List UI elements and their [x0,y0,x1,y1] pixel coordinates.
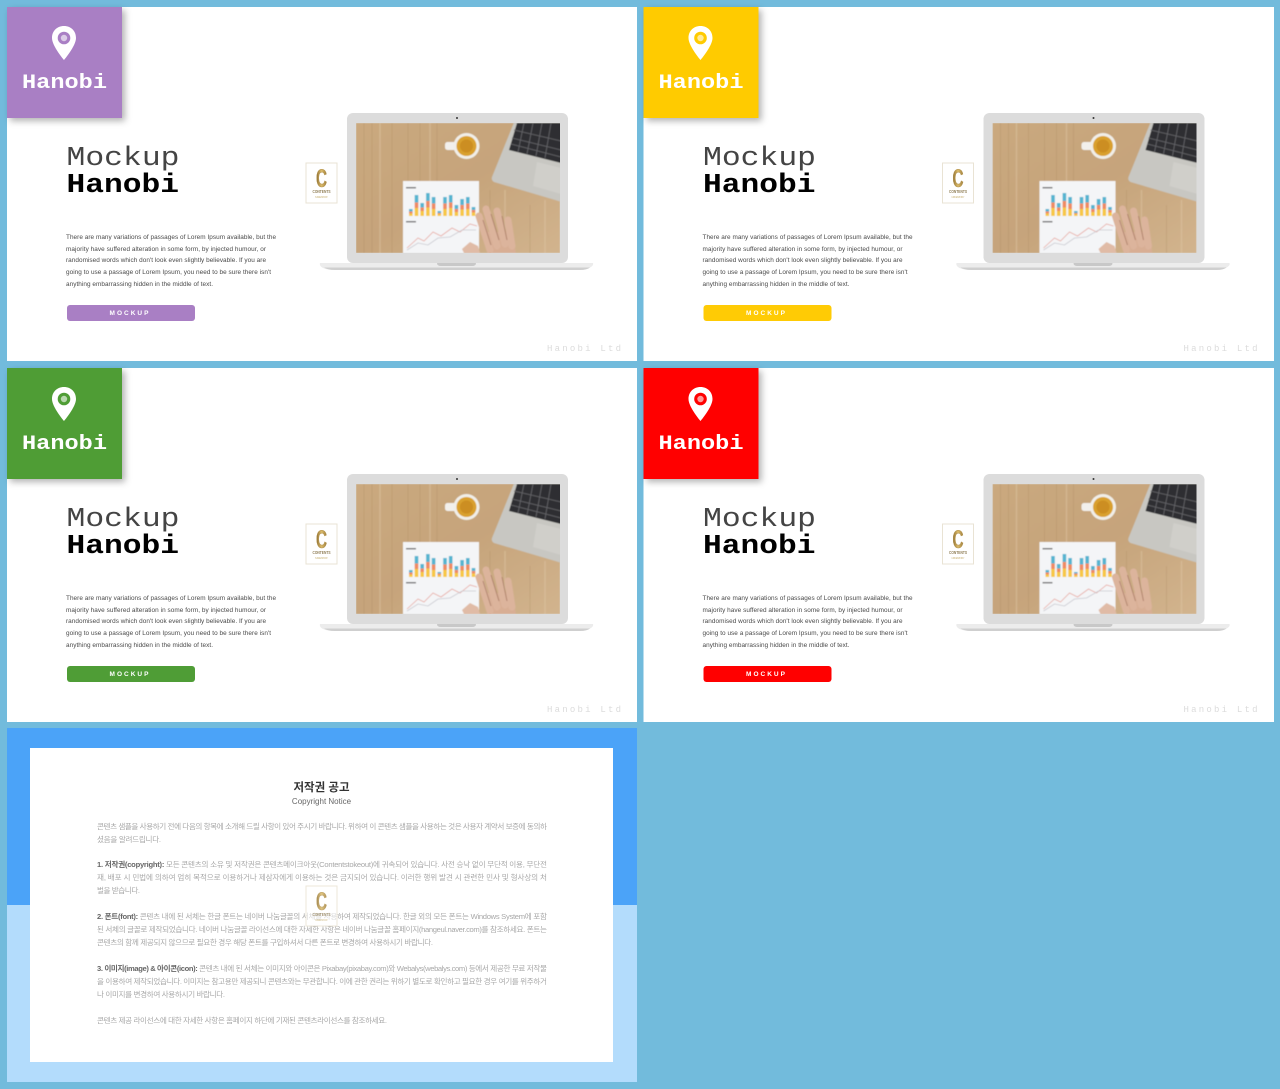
body text: going to use a passage of Lorem Ipsum, you need to be sure there isn't [702,269,908,276]
notice section 1: 1. 저작권(copyright): 모든 콘텐츠의 소유 및 저작권은 콘텐츠메이크아웃(Contentstokeout)에 귀속되어 있습니다. 사전 승낙 없이 무단적 이용, 무단전 [97,859,547,869]
button [67,666,195,682]
watermark logo [306,524,337,564]
body text: majority have suffered alteration in some form, by injected humour, or [66,246,267,253]
body text: going to use a passage of Lorem Ipsum, you need to be sure there isn't [66,630,271,637]
badge [644,7,758,118]
watermark logo: MAKE STORY [315,556,328,560]
body text: randomised words which don't look even slightly believable. If you are [66,257,266,264]
watermark logo: C [952,165,964,193]
body text: anything embarrassing hidden in the middle of text. [66,642,213,649]
heading: Mockup [66,143,180,173]
notice intro [97,821,547,844]
watermark logo [306,163,337,203]
watermark logo [942,524,974,564]
watermark logo: C [316,165,327,193]
heading [66,143,180,200]
footer label: Hanobi Ltd [1184,344,1258,354]
body text: There are many variations of passages of Lorem Ipsum available, but the [702,595,913,602]
heading: Hanobi [66,531,179,561]
badge: Hanobi [658,72,744,95]
panel: yellow mockup slide [644,7,1274,361]
heading: Mockup [703,143,816,173]
laptop mockup [320,474,593,631]
body text [702,234,913,288]
laptop mockup [956,474,1230,631]
body text: majority have suffered alteration in some form, by injected humour, or [66,607,267,614]
notice subtitle: Copyright Notice [292,797,352,806]
body text: majority have suffered alteration in some form, by injected humour, or [702,607,903,614]
body text: randomised words which don't look even slightly believable. If you are [66,618,266,625]
badge [7,7,122,118]
button: MOCKUP [746,671,787,678]
notice section 1 [97,859,547,895]
panel: copyright notice slide [7,728,637,1082]
notice section 3 [97,963,547,999]
badge: Hanobi [22,433,107,456]
heading: Hanobi [703,170,816,200]
heading: Hanobi [66,170,179,200]
body text: anything embarrassing hidden in the middle of text. [66,281,213,288]
badge [7,368,122,479]
footer label: Hanobi Ltd [1184,705,1258,715]
footer label: Hanobi Ltd [547,344,621,354]
watermark logo [942,163,974,203]
badge: Hanobi [22,72,107,95]
body text: going to use a passage of Lorem Ipsum, you need to be sure there isn't [702,630,908,637]
button: MOCKUP [746,310,787,317]
body text: anything embarrassing hidden in the middle of text. [702,642,850,649]
notice section 1: 벌을 받습니다. [97,885,140,895]
watermark logo: MAKE STORY [952,556,964,560]
body text: There are many variations of passages of Lorem Ipsum available, but the [66,595,276,602]
heading [703,504,816,561]
body text: majority have suffered alteration in some form, by injected humour, or [702,246,903,253]
notice intro: 콘텐츠 샘플을 사용하기 전에 다음의 항목에 소개해 드릴 사항이 있어 주시기 바랍니다. 위하여 이 콘텐츠 샘플을 사용하는 것은 사용자 계약서 보증에 동의하 [97,821,547,831]
body text [702,595,913,649]
notice section 1: 재, 배포 시 민법에 의하여 엄히 목적으로 이용하거나 제삼자에게 이용하는 것은 금지되어 있습니다. 이러한 행위 발견 시 관련한 민사 및 형사상의 처 [97,872,547,882]
button [704,666,832,682]
watermark logo: CONTENTS [312,550,330,555]
button: MOCKUP [110,310,150,317]
body text [66,595,276,649]
panel: purple mockup slide [7,7,637,361]
footer label: Hanobi Ltd [547,705,621,715]
body text: There are many variations of passages of Lorem Ipsum available, but the [66,234,276,241]
laptop mockup [956,113,1230,270]
notice title: 저작권 공고 [293,780,350,794]
button [67,305,195,321]
laptop mockup [320,113,593,270]
heading [66,504,180,561]
notice section 2: 2. 폰트(font): 콘텐츠 내에 된 서체는 한글 폰트는 네이버 나눔글꼴의 서체를 사용하여 제작되었습니다. 한글 외의 모든 폰트는 Windows System에 포함 [97,911,547,921]
watermark logo: CONTENTS [312,189,330,194]
body text [66,234,276,288]
watermark logo: C [952,526,964,554]
body text: randomised words which don't look even slightly believable. If you are [702,618,903,625]
body text: randomised words which don't look even slightly believable. If you are [702,257,903,264]
watermark logo: C [316,526,327,554]
watermark logo: C [316,888,327,916]
notice section 2: 콘텐츠의 함께 제공되지 않으므로 필요한 경우 해당 폰트를 구입하셔서 다른 폰트로 변경하여 사용하시기 바랍니다. [97,937,433,947]
heading: Mockup [66,504,180,534]
watermark logo: MAKE STORY [315,918,328,922]
panel: red mockup slide [644,368,1274,722]
body text: going to use a passage of Lorem Ipsum, you need to be sure there isn't [66,269,271,276]
button: MOCKUP [110,671,150,678]
notice intro: 셨음을 알려드립니다. [97,834,161,844]
watermark logo: CONTENTS [949,550,967,555]
badge [644,368,758,479]
notice section 3: 을 이용하여 제작되었습니다. 이미지는 참고용만 제공되니 콘텐츠와는 무관합니다. 이에 관한 권리는 위하기 별도로 확인하고 필요한 경우 여기를 위주하거 [97,976,547,986]
heading: Mockup [703,504,816,534]
heading: Hanobi [703,531,816,561]
watermark logo: MAKE STORY [315,195,328,199]
body text: anything embarrassing hidden in the middle of text. [702,281,850,288]
badge: Hanobi [658,433,744,456]
watermark logo: MAKE STORY [952,195,964,199]
watermark logo [306,886,337,926]
notice section 2: 된 서체의 글꼴로 제작되었습니다. 네이버 나눔글꼴 라이선스에 대한 자세한 사항은 네이버 나눔글꼴 홈페이지(hangeul.naver.com)를 참조하세요. 폰트는 [97,924,547,934]
notice section 3: 3. 이미지(image) & 아이콘(icon): 콘텐츠 내에 된 서체는 이미지와 아이콘은 Pixabay(pixabay.com)와 Webalys(webalys.com) 등에서 제공한 무료 저작물 [97,963,547,973]
notice section 3: 나 이미지를 변경하여 사용하시기 바랍니다. [97,989,225,999]
notice closing line: 콘텐츠 제공 라이선스에 대한 자세한 사항은 홈페이지 하단에 기재된 콘텐츠라이선스를 참조하세요. [97,1015,387,1025]
body text: There are many variations of passages of Lorem Ipsum available, but the [702,234,913,241]
button [704,305,832,321]
watermark logo: CONTENTS [312,912,330,917]
panel: green mockup slide [7,368,637,722]
heading [703,143,816,200]
notice section 2 [97,911,547,947]
watermark logo: CONTENTS [949,189,967,194]
